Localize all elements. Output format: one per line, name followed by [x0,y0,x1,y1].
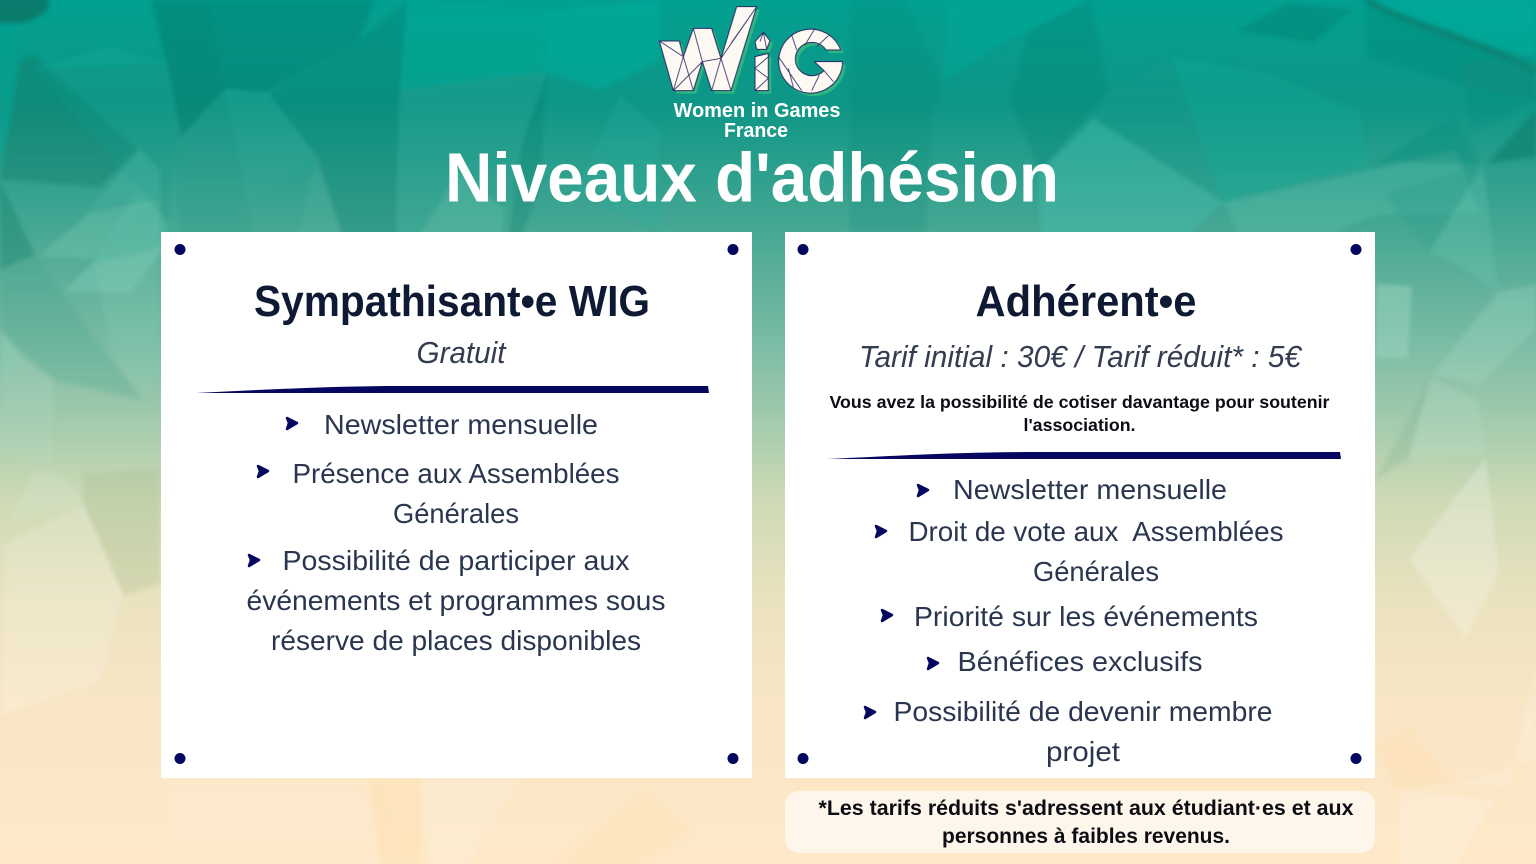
note on extra contribution: l'association. [1024,415,1136,435]
note on extra contribution: Vous avez la possibilité de cotiser davantage pour soutenir [830,392,1330,412]
heading: Adhérent•e [976,277,1196,326]
benefit list: Générales [1033,556,1159,587]
corner pins [798,244,1362,764]
corner pins [174,244,738,764]
subtitle: tarifs: Tarif initial : 30€ / Tarif réduit* : 5€ [859,339,1303,374]
note on extra contribution [830,392,1330,435]
benefit list [865,474,1284,767]
logo caption: France [724,119,788,142]
bullet arrows [249,418,297,566]
brush divider [196,386,709,393]
benefit list: Newsletter mensuelle [324,409,598,440]
subtitle: Gratuit [416,335,507,370]
logo caption [674,99,840,142]
benefit list: projet [1046,736,1120,767]
benefit list: réserve de places disponibles [271,625,641,656]
brush divider [827,452,1341,459]
footnote: reduced rates: *Les tarifs réduits s'adressent aux étudiant·es et aux [818,797,1354,820]
panel: Adhérent·e [785,232,1375,778]
title: Niveaux d'adhésion [445,138,1059,216]
benefit list: Priorité sur les événements [914,601,1258,632]
benefit list: Newsletter mensuelle [953,474,1227,505]
benefit list: Présence aux Assemblées [292,458,620,489]
benefit list [246,409,666,656]
benefit list: Possibilité de devenir membre [894,696,1272,727]
footnote: reduced rates: personnes à faibles revenus. [942,825,1230,848]
heading: Sympathisant•e WIG [254,277,650,326]
benefit list: Bénéfices exclusifs [958,646,1202,677]
bullet arrows [865,485,938,718]
benefit list: Droit de vote aux Assemblées [908,516,1284,547]
benefit list: Générales [393,498,519,529]
logo: Women in Games France [659,7,846,142]
logo mark: WiG [659,7,846,96]
footnote: reduced rates [785,791,1375,853]
logo caption: Women in Games [674,99,840,122]
benefit list: Possibilité de participer aux [282,545,630,576]
panel: Sympathisant·e WIG [161,232,752,778]
benefit list: événements et programmes sous [246,585,666,616]
